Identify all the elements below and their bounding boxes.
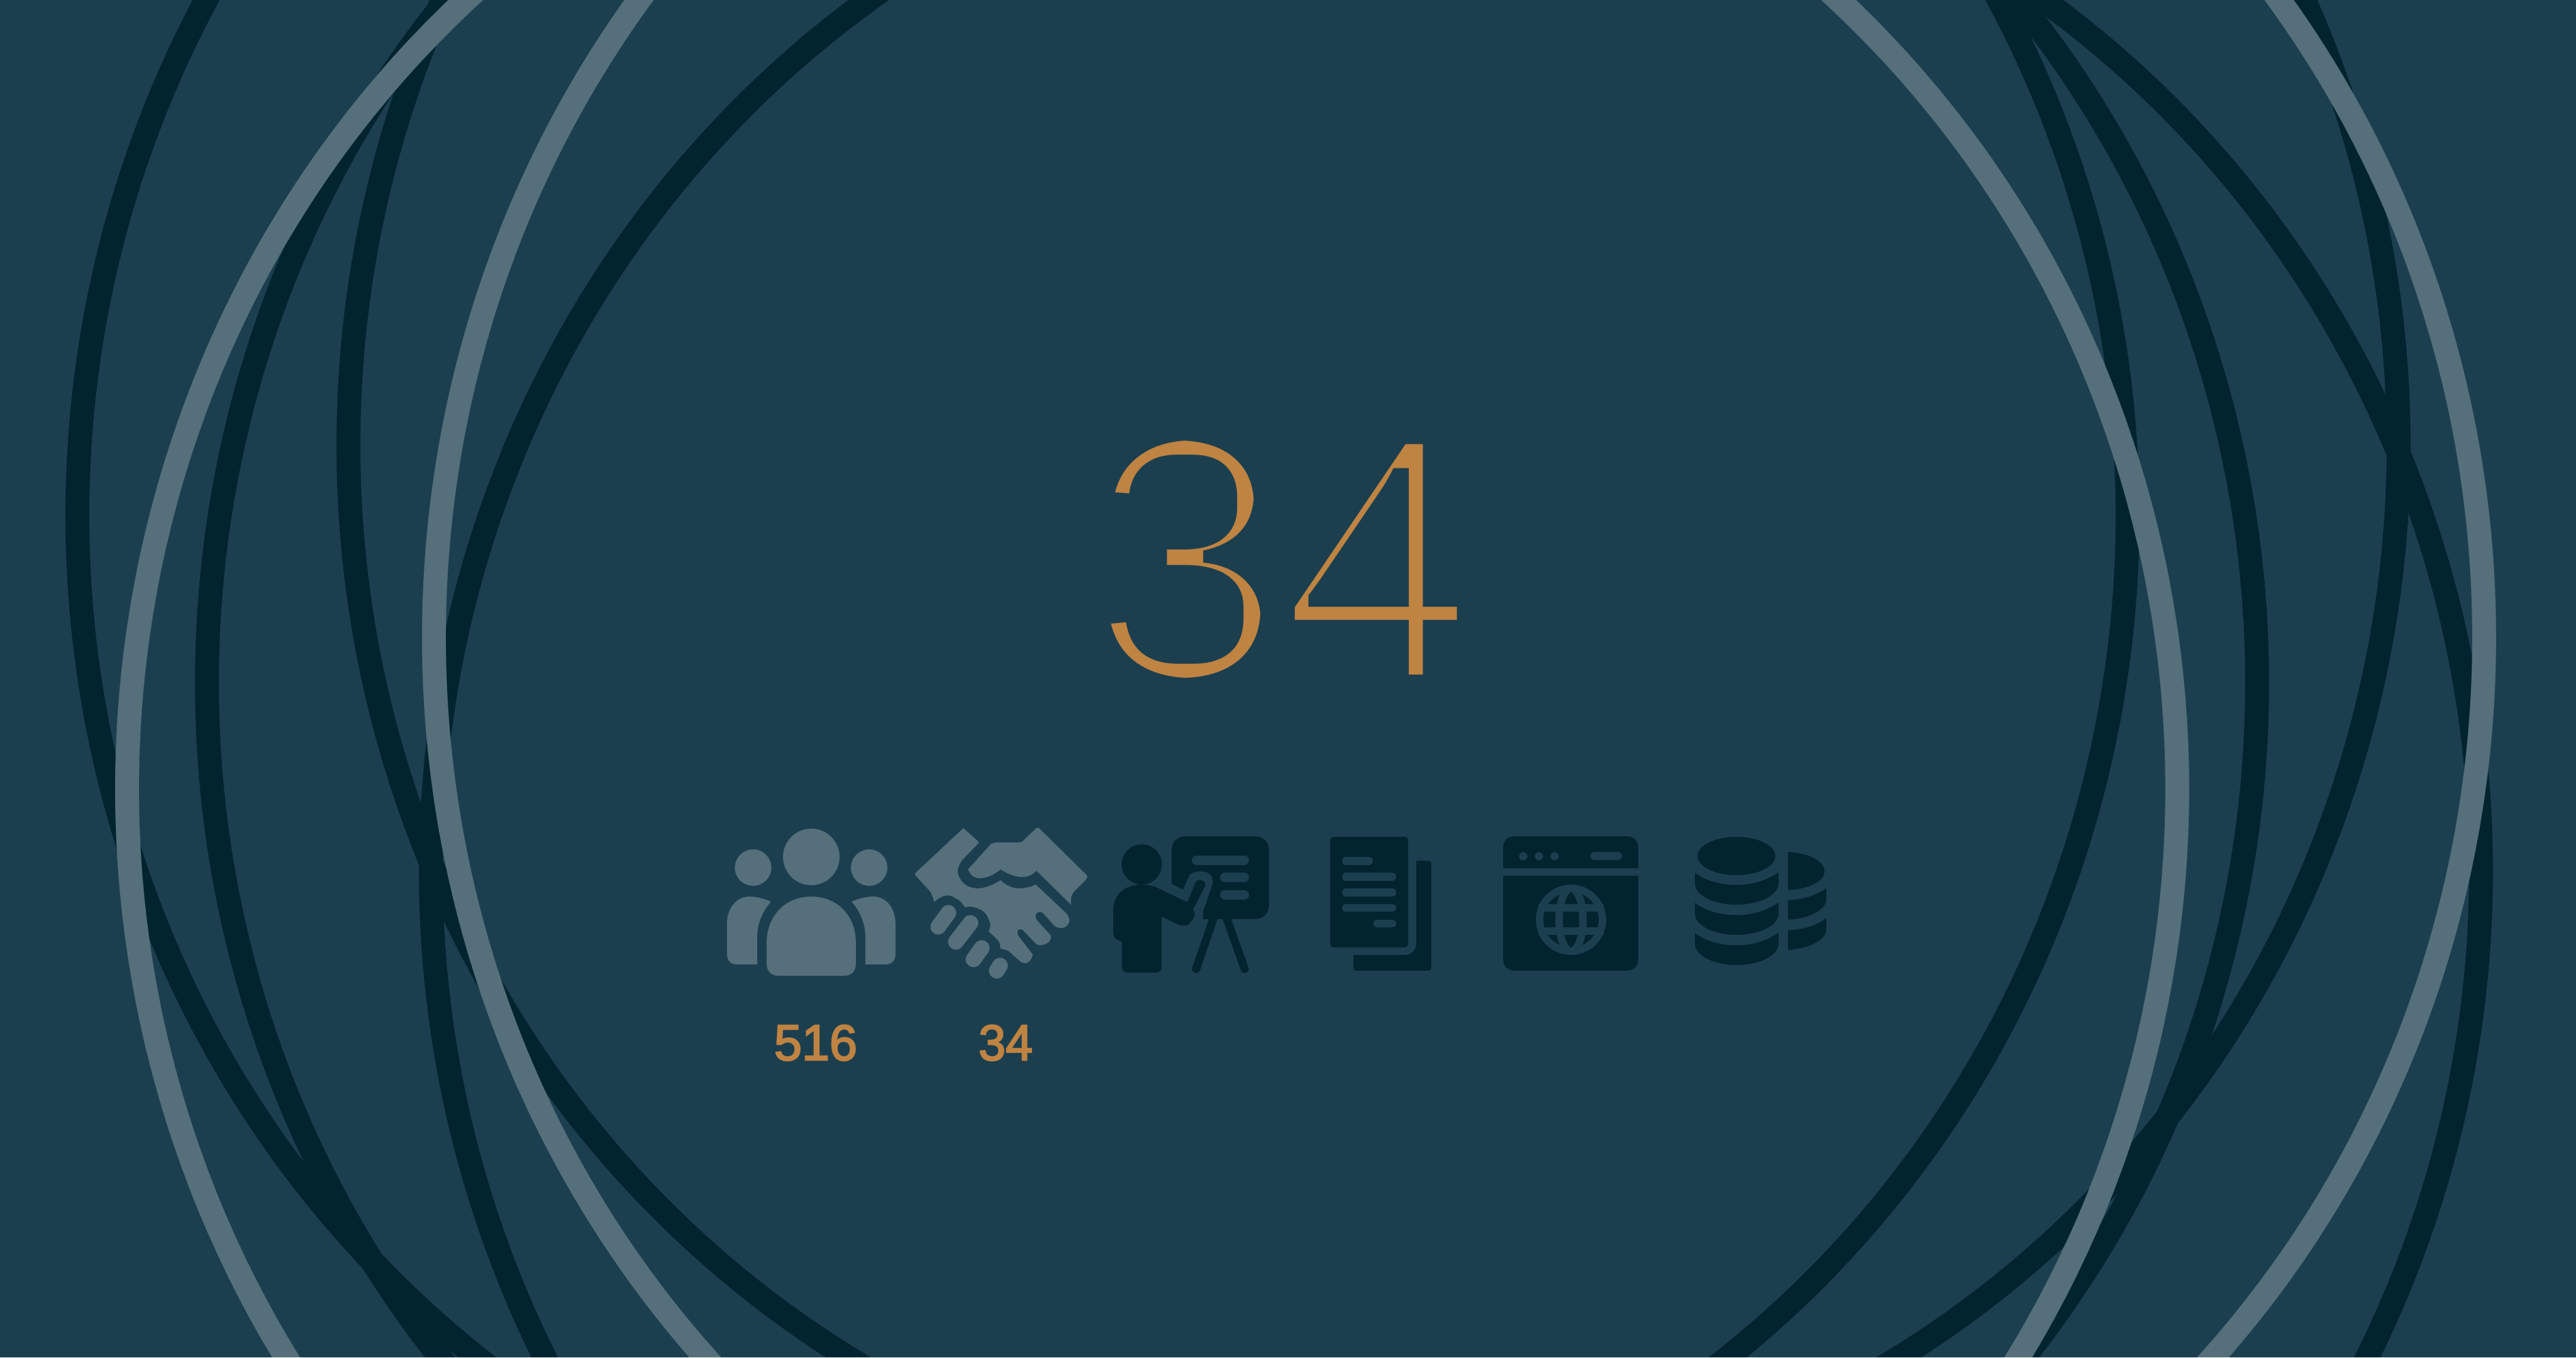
icon: presenter at board (1113, 836, 1269, 973)
label: people count: 516 (774, 1015, 857, 1071)
icon: people (727, 829, 896, 976)
big number: 34 (1088, 363, 1475, 755)
icon: browser with globe (1503, 836, 1638, 971)
icon: documents (1330, 837, 1431, 971)
icon: database coins (1695, 837, 1826, 965)
icon: handshake (915, 827, 1087, 971)
label: partnerships count: 34 (979, 1015, 1033, 1071)
